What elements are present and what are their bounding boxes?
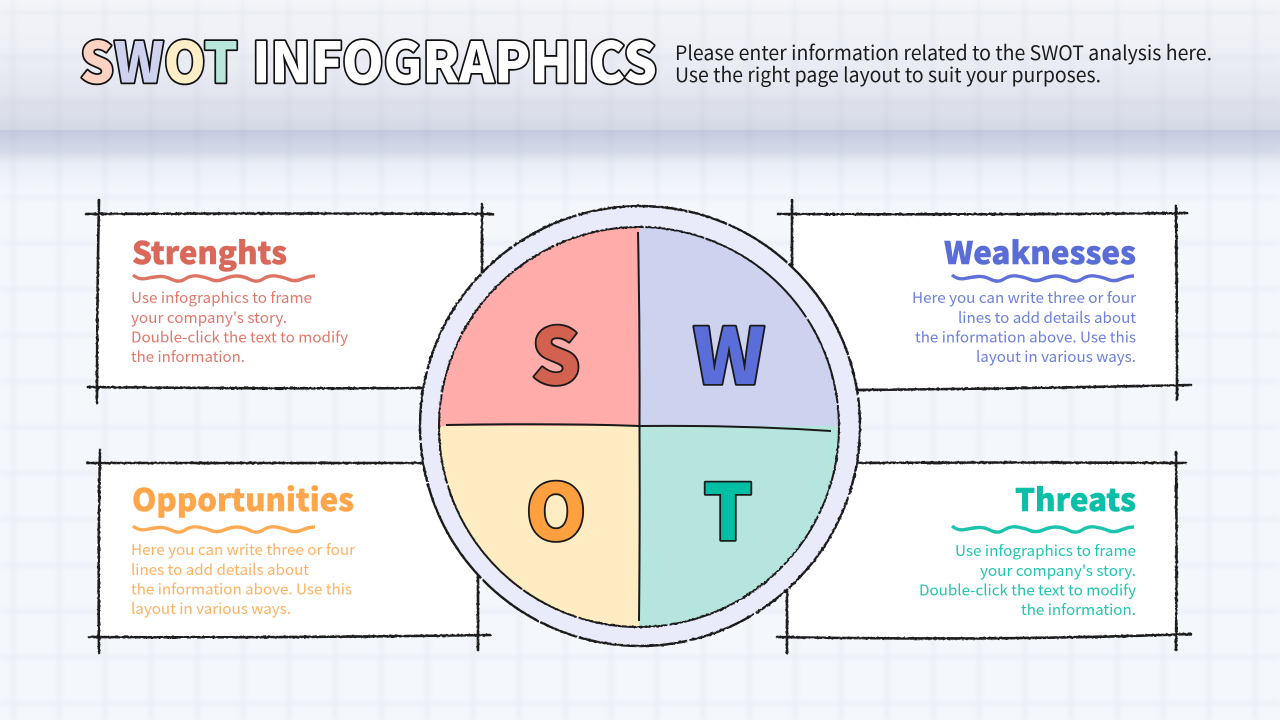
panel: opportunities [87,450,490,653]
body text: the information. [1021,599,1136,620]
heading: Strenghts: Strenghts [132,228,287,273]
wavy underline [133,526,315,532]
cross lines [446,232,831,621]
wavy underline [133,275,315,281]
body text: Double-click the text to modify [131,326,348,348]
quadrants [439,227,840,627]
title main: INFOGRAPHICS: INFOGRAPHICS [252,18,657,100]
letter W: W [693,296,765,407]
body text: layout in various ways. [976,346,1136,367]
wavy underline [952,275,1134,281]
letter S: S [531,296,581,407]
panel: weaknesses [778,200,1191,400]
panel: threats [777,452,1191,653]
header description: Use the right page layout to suit your purposes. [675,59,1101,88]
body text [912,287,1136,367]
inner ring [439,227,839,627]
wavy underline [952,526,1134,532]
body text: your company's story. [131,307,287,328]
body text [919,540,1136,620]
body text [131,539,355,619]
body text: Use infographics to frame [131,287,312,308]
body text: lines to add details about [958,307,1136,328]
body text: the information above. Use this [915,326,1136,348]
title [80,18,657,100]
body text: the information above. Use this [131,578,352,600]
letter T: T [703,452,753,563]
body text: the information. [131,346,245,367]
body text: Double-click the text to modify [919,580,1136,600]
heading: Threats: Threats [1015,475,1136,520]
SWOT circle [420,206,860,646]
body text: Here you can write three or four [912,287,1136,308]
heading: Weaknesses: Weaknesses [944,228,1136,273]
header description [675,37,1212,88]
heading: Opportunities: Opportunities [132,475,354,520]
body text: Here you can write three or four [131,539,355,560]
body text [131,287,348,367]
body text: your company's story. [980,560,1136,581]
body text: lines to add details about [131,559,309,580]
header description: Please enter information related to the SWOT analysis here. [675,37,1212,66]
title accent: SWOT: SWOT [80,18,238,100]
body text: Use infographics to frame [955,540,1136,561]
panel: strengths [86,200,493,403]
outer ring [420,206,860,646]
letter O: O [526,452,586,563]
body text: layout in various ways. [131,598,291,619]
